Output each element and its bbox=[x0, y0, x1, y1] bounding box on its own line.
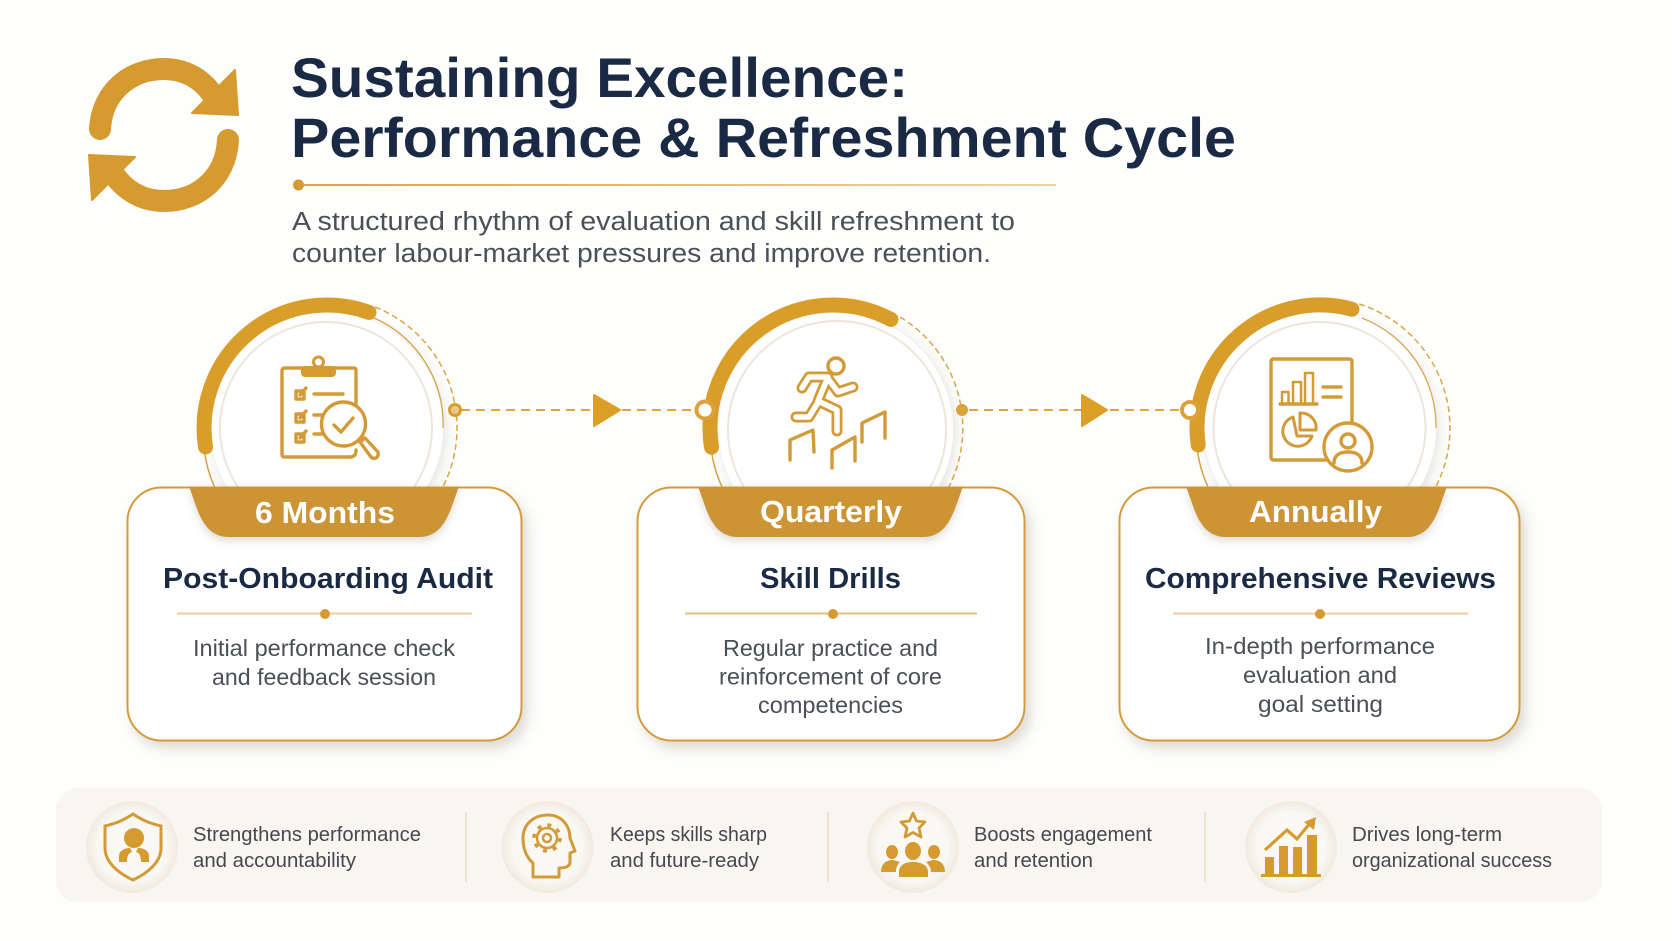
panel: 6 months bbox=[128, 305, 522, 740]
card 2 description bbox=[719, 635, 942, 718]
card 2 heading: Skill Drills bbox=[760, 563, 901, 595]
card 3 description bbox=[1205, 633, 1435, 717]
badge: 6 months: 6 Months bbox=[255, 495, 395, 530]
card 3 description: In-depth performance bbox=[1205, 633, 1435, 659]
benefit text 1: Strengthens performance bbox=[193, 824, 421, 846]
benefit: organizational success bbox=[1245, 801, 1552, 893]
benefit: skills sharp bbox=[502, 801, 767, 893]
badge: quarterly bbox=[698, 487, 963, 537]
card 2 description: Regular practice and bbox=[723, 635, 938, 661]
benefit text 3: and retention bbox=[974, 850, 1093, 872]
icon: clipboard with magnifier bbox=[282, 357, 378, 458]
panel: quarterly bbox=[638, 305, 1024, 740]
card 3 heading: Comprehensive Reviews bbox=[1145, 563, 1496, 595]
arrow: 6 months to quarterly bbox=[461, 395, 696, 426]
card 1 description bbox=[193, 635, 455, 690]
title: Performance & Refreshment Cycle bbox=[291, 106, 1236, 169]
card 3 description: goal setting bbox=[1258, 691, 1383, 717]
card 3 divider bbox=[1173, 609, 1468, 619]
card 3 bbox=[1120, 488, 1520, 740]
card 2 bbox=[638, 488, 1024, 740]
progress ring 3 bbox=[1182, 304, 1450, 544]
icon: report with chart and person bbox=[1271, 359, 1372, 471]
icon disc: team with star bbox=[867, 801, 959, 893]
card 2 description: reinforcement of core bbox=[719, 664, 942, 690]
benefit text 2: Keeps skills sharp bbox=[610, 824, 767, 846]
badge: annually bbox=[1186, 487, 1447, 537]
benefit text 4 bbox=[1352, 824, 1552, 872]
badge: annually: Annually bbox=[1249, 494, 1383, 529]
card 1 divider bbox=[177, 609, 472, 619]
benefit text 3 bbox=[974, 824, 1152, 872]
progress ring 1 bbox=[204, 305, 460, 544]
title divider rule bbox=[293, 180, 1056, 190]
benefit: performance and accountability bbox=[86, 801, 421, 893]
benefit text 1 bbox=[193, 824, 421, 872]
benefit text 2 bbox=[610, 824, 767, 872]
progress ring 2 bbox=[696, 305, 968, 547]
subtitle bbox=[292, 208, 1015, 268]
panel: annually bbox=[1120, 304, 1520, 740]
icon: runner over hurdles bbox=[790, 358, 885, 468]
title bbox=[291, 46, 1236, 169]
card 1 heading: Post-Onboarding Audit bbox=[163, 563, 493, 595]
card 1 description: and feedback session bbox=[212, 664, 436, 690]
benefit text 3: Boosts engagement bbox=[974, 824, 1152, 846]
benefit: engagement bbox=[867, 801, 1152, 893]
badge: 6 months bbox=[189, 487, 459, 537]
icon disc: shield person bbox=[86, 801, 178, 893]
card 1 description: Initial performance check bbox=[193, 635, 455, 661]
subtitle: counter labour-market pressures and improve retention. bbox=[292, 240, 991, 268]
benefit text 4: organizational success bbox=[1352, 850, 1552, 872]
band background bbox=[56, 788, 1602, 902]
icon disc: growth chart bbox=[1245, 801, 1337, 893]
benefit text 1: and accountability bbox=[193, 850, 356, 872]
panel: benefits band bbox=[56, 788, 1602, 902]
subtitle: A structured rhythm of evaluation and skill refreshment to bbox=[292, 208, 1015, 236]
benefit text 4: Drives long-term bbox=[1352, 824, 1502, 846]
card 2 divider bbox=[685, 609, 977, 619]
icon: refresh cycle arrows bbox=[89, 69, 238, 201]
card 1 bbox=[128, 488, 522, 740]
benefit text 2: and future-ready bbox=[610, 850, 759, 872]
arrow: quarterly to annually bbox=[969, 395, 1182, 426]
card 3 description: evaluation and bbox=[1243, 662, 1397, 688]
badge: quarterly: Quarterly bbox=[760, 494, 903, 529]
card 2 description: competencies bbox=[758, 692, 903, 718]
icon disc: head with gear bbox=[502, 801, 594, 893]
title: Sustaining Excellence: bbox=[291, 46, 908, 109]
